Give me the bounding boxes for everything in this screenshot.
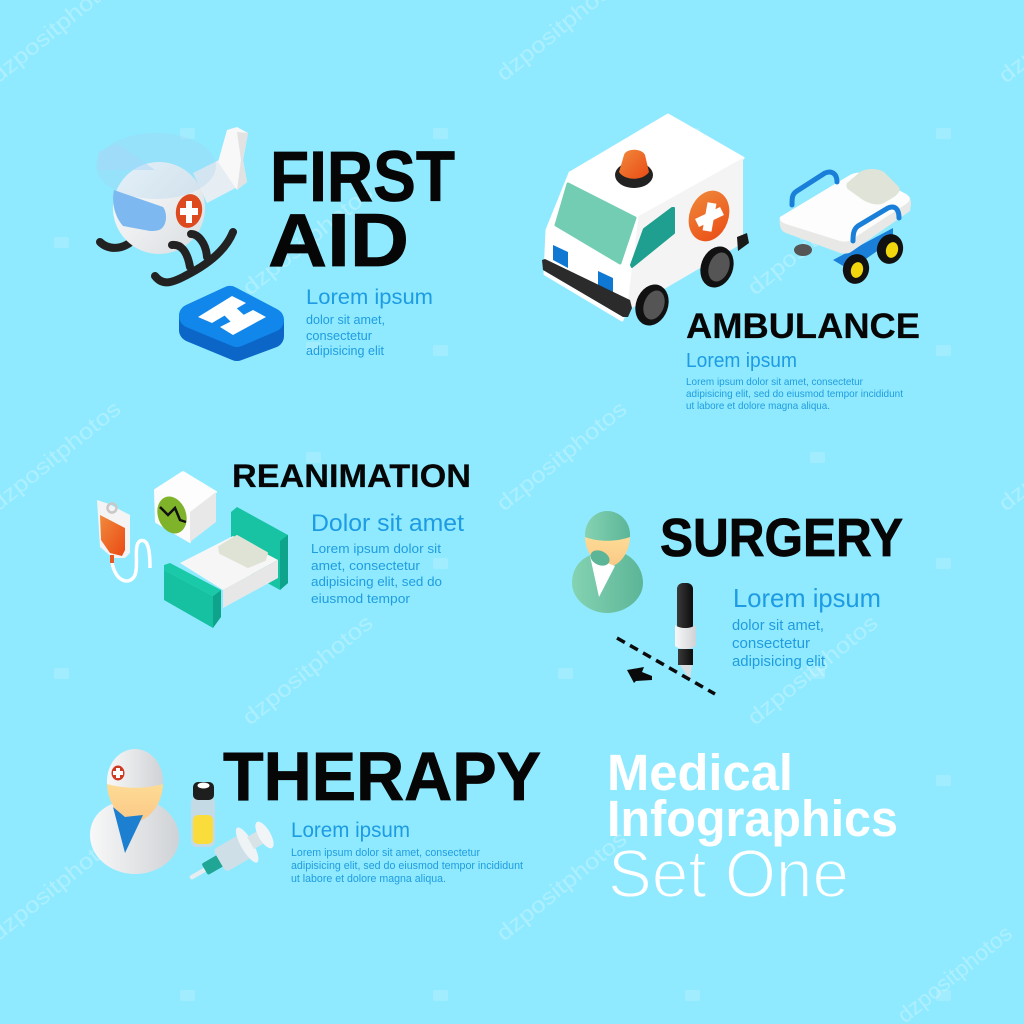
icon: helicopter — [96, 127, 248, 282]
text block: adipisicing elit, sed do — [311, 574, 442, 589]
text block: Lorem ipsum dolor sit amet, consectetur — [291, 847, 480, 859]
text block: dolor sit amet, — [732, 618, 824, 634]
icon: hospital bed — [164, 507, 288, 628]
text block: Lorem ipsum dolor sit — [311, 541, 441, 556]
text block: consectetur — [306, 329, 372, 343]
main title: medical infographics set one: Infographics — [607, 790, 898, 847]
icon: stretcher — [780, 169, 911, 287]
title: first aid: AID — [268, 198, 409, 282]
main title: medical infographics set one — [607, 744, 898, 912]
panel: ambulance — [542, 115, 920, 412]
subheading: Dolor sit amet — [311, 510, 464, 537]
watermark: dzpositphotos — [742, 180, 882, 300]
text block: adipisicing elit — [306, 344, 385, 358]
text block: adipisicing elit — [732, 654, 825, 670]
icon: surgeon — [572, 511, 643, 613]
text block: ut labore et dolore magna aliqua. — [686, 400, 830, 412]
panel: surgery — [572, 508, 903, 694]
subheading: Lorem ipsum — [733, 583, 881, 613]
icon: syringe — [180, 815, 280, 895]
text block: dolor sit amet, — [306, 313, 385, 327]
text block: Lorem ipsum dolor sit amet, consectetur — [686, 376, 863, 388]
watermark: dzpositphotos — [491, 826, 631, 946]
watermark: dzpositphotos — [237, 180, 377, 300]
icon: dashed incision line — [617, 638, 715, 694]
icon: ambulance — [542, 115, 749, 330]
panel: first aid — [96, 127, 455, 358]
main title: medical infographics set one: Medical — [607, 744, 793, 801]
watermark: dzpositphotos — [237, 610, 377, 730]
text block: ut labore et dolore magna aliqua. — [291, 873, 446, 885]
title: ambulance: AMBULANCE — [686, 307, 920, 346]
panel: therapy — [90, 738, 541, 895]
title: first aid — [268, 138, 455, 282]
icon: iv drip bag — [97, 500, 150, 581]
text block — [291, 847, 523, 885]
icon: medicine vial — [191, 782, 215, 847]
icon: helipad — [191, 296, 272, 349]
icon: arrow — [627, 667, 652, 683]
subheading: Lorem ipsum — [306, 286, 433, 309]
subheading: Lorem ipsum — [291, 819, 410, 842]
text block — [306, 313, 385, 358]
main title: medical infographics set one: Set One — [608, 836, 849, 912]
watermark: dzpositphotos — [742, 610, 882, 730]
text block — [311, 541, 442, 606]
title: surgery: SURGERY — [660, 508, 903, 568]
text block: eiusmod tempor — [311, 591, 411, 606]
text block: consectetur — [732, 636, 810, 652]
text block: amet, consectetur — [311, 558, 421, 573]
title: first aid: FIRST — [270, 138, 455, 217]
title: reanimation: REANIMATION — [232, 458, 471, 494]
text block — [686, 376, 903, 412]
icon: doctor — [90, 749, 179, 874]
watermark: dzpositphotos — [491, 396, 631, 516]
text block: adipisicing elit, sed do eiusmod tempor incididunt — [686, 388, 903, 400]
text block — [732, 618, 825, 670]
title: therapy: THERAPY — [223, 738, 541, 815]
text block: adipisicing elit, sed do eiusmod tempor incididunt — [291, 860, 523, 872]
panel: reanimation — [97, 458, 471, 628]
icon: heart monitor — [152, 472, 216, 542]
subheading: Lorem ipsum — [686, 350, 797, 372]
icon: scalpel — [675, 583, 696, 680]
